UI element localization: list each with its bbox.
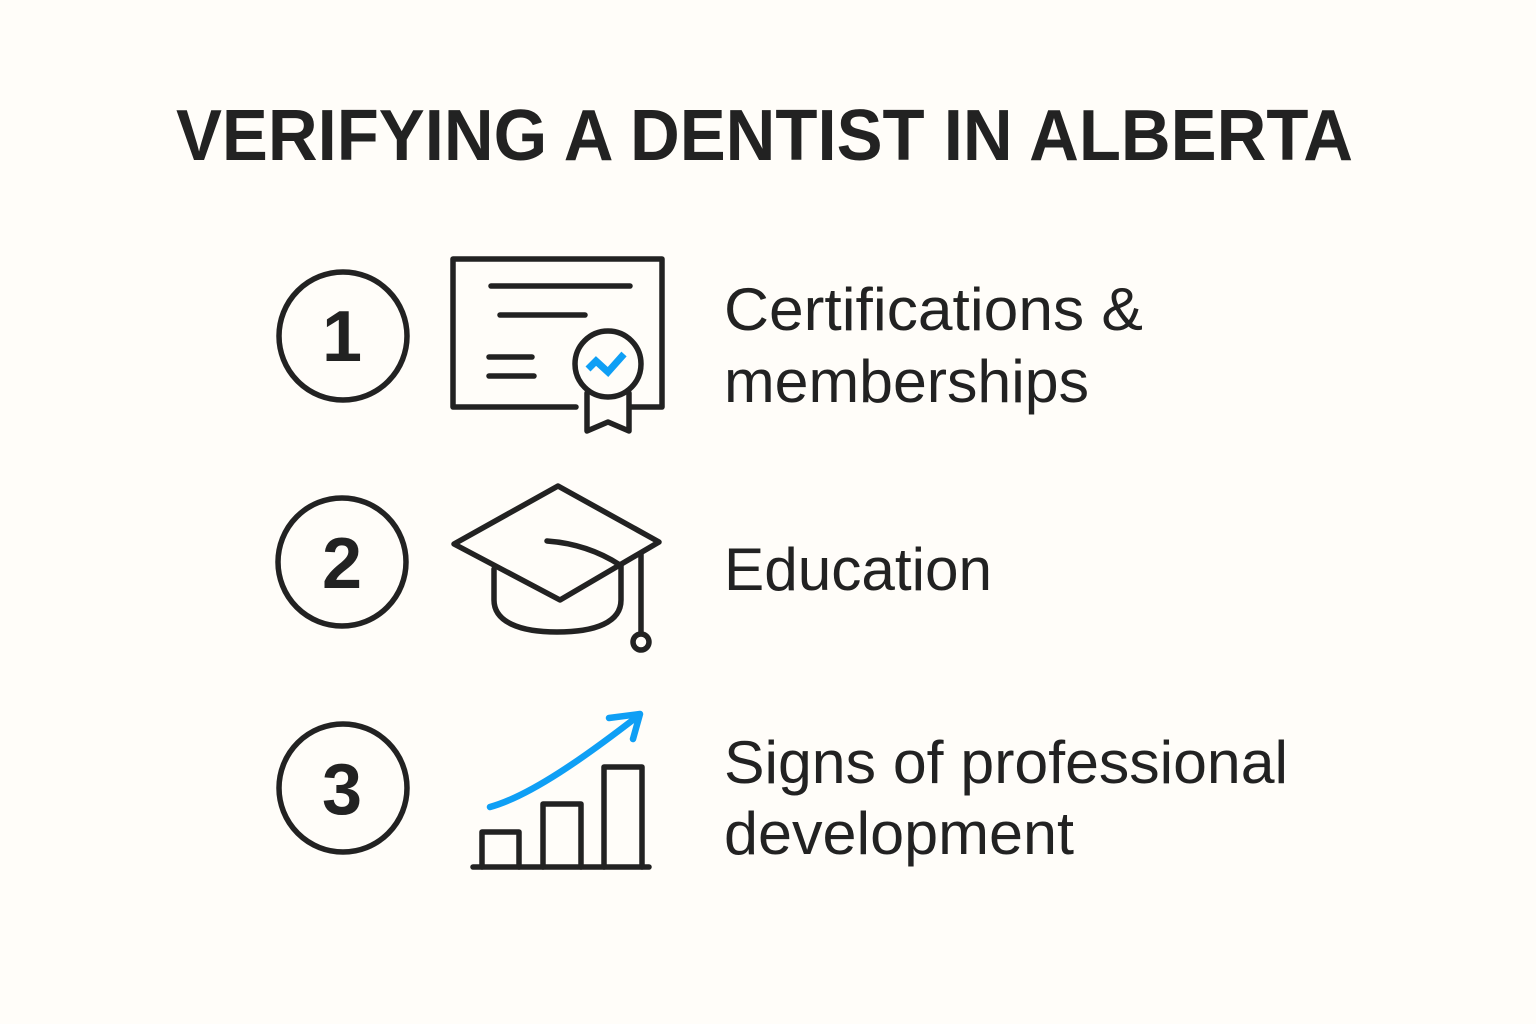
title: VERIFYING A DENTIST IN ALBERTA	[176, 96, 1353, 176]
step 1 label line 2: memberships	[724, 348, 1089, 415]
step 2 number badge	[278, 498, 406, 626]
step 2 label: Education	[724, 536, 992, 603]
step 1 number badge	[279, 272, 407, 400]
step 3 number badge: 3	[322, 750, 362, 830]
icon: rising bar chart with arrow	[473, 714, 649, 867]
step 3 label line 2: development	[724, 800, 1074, 867]
icon: graduation cap	[454, 486, 659, 650]
step 1 number badge: 1	[322, 297, 362, 377]
icon: certificate	[453, 259, 662, 431]
step 2 number badge: 2	[322, 524, 362, 604]
step 1 label: Certifications &	[724, 276, 1143, 343]
step 3 label: Signs of professional	[724, 729, 1288, 796]
step 3 number badge	[279, 724, 407, 852]
